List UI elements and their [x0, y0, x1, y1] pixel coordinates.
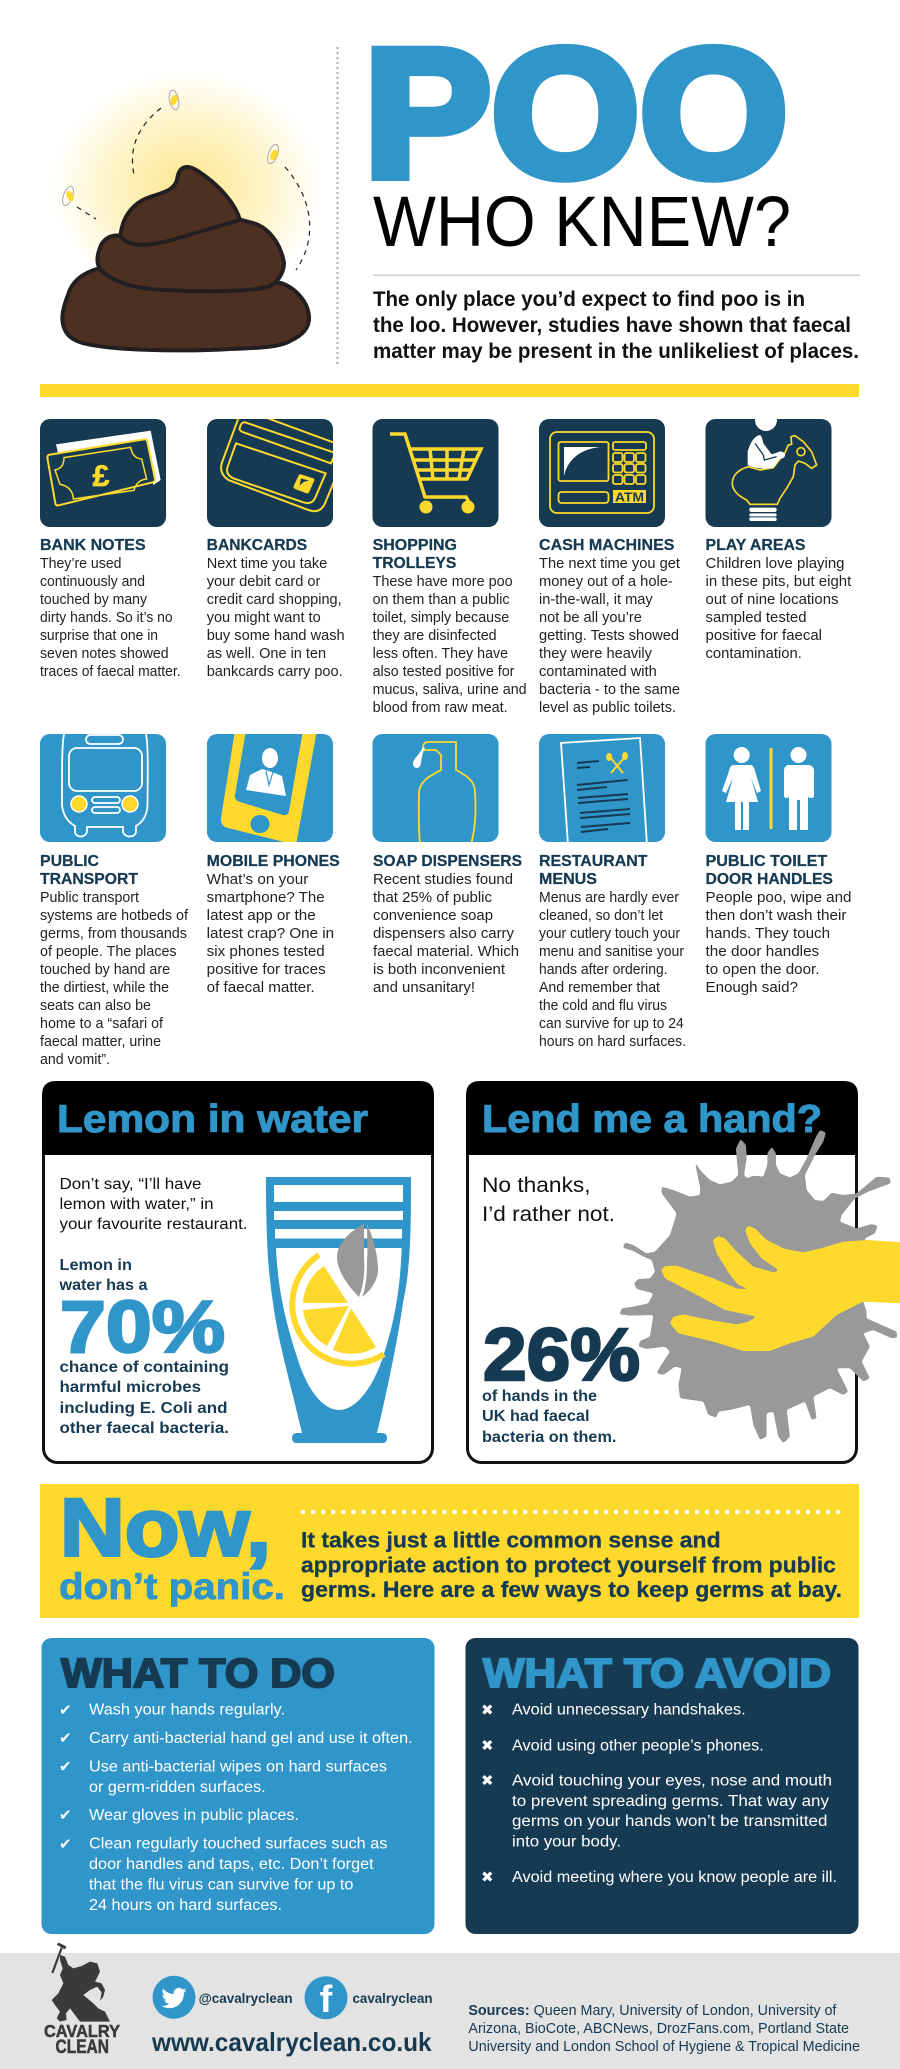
text: [706, 537, 852, 662]
stat caption: harmful microbes: [60, 1379, 201, 1396]
text: DOOR HANDLES: [706, 871, 833, 888]
text: PLAY AREAS: [706, 537, 806, 554]
intro text: No thanks,: [482, 1174, 591, 1197]
checklist: or germ-ridden surfaces.: [89, 1779, 266, 1796]
checklist: ✔: [59, 1701, 72, 1719]
text: BANK NOTES: [40, 537, 146, 554]
checklist: Clean regularly touched surfaces such as: [89, 1836, 388, 1853]
social: facebook: [304, 1976, 432, 2021]
checklist: ✔: [59, 1806, 72, 1824]
text: your debit card or: [207, 573, 320, 590]
text: buy some hand wash: [207, 627, 345, 644]
text: [40, 853, 189, 1068]
avoid list: Avoid unnecessary handshakes.: [512, 1702, 746, 1719]
icon: trolley: [372, 419, 498, 527]
card: restaurant menus: [539, 734, 686, 1050]
text: of people. The places: [40, 943, 177, 960]
text: They’re used: [40, 555, 122, 572]
text: as well. One in ten: [207, 645, 326, 662]
icon: knight on horse: [51, 1943, 110, 2022]
text: faecal matter, urine: [40, 1033, 161, 1050]
intro text: I’d rather not.: [482, 1203, 615, 1226]
banner text: germs. Here are a few ways to keep germs at bay.: [301, 1577, 842, 1602]
avoid list: ✖: [481, 1772, 494, 1790]
avoid list: Avoid meeting where you know people are ill.: [512, 1869, 837, 1886]
social: facebook: f: [320, 1979, 333, 2021]
icon: menu: [539, 734, 665, 845]
heading: don't panic.: don’t panic.: [59, 1566, 285, 1607]
intro text: [60, 1176, 248, 1233]
stat text: water has a: [58, 1277, 148, 1294]
text: [40, 537, 181, 680]
text: you might want to: [207, 609, 321, 626]
stat caption: [482, 1388, 616, 1446]
icon: flies: [60, 89, 281, 207]
text: in these pits, but eight: [706, 573, 852, 590]
text: [207, 537, 345, 680]
text: [706, 853, 852, 996]
text: People poo, wipe and: [706, 889, 852, 906]
checklist: Use anti-bacterial wipes on hard surfaces: [89, 1758, 387, 1775]
text: in-the-wall, it may: [539, 591, 653, 608]
text: Recent studies found: [373, 871, 513, 888]
banner: now don't panic: [40, 1482, 859, 1618]
text: Next time you take: [207, 555, 327, 572]
avoid list: ✖: [481, 1701, 494, 1719]
intro text: [373, 288, 859, 363]
illustration: yellow hand: [661, 1226, 900, 1351]
text: and unsanitary!: [373, 979, 475, 996]
stat text: [58, 1257, 148, 1294]
stat caption: including E. Coli and: [60, 1400, 228, 1417]
text: contamination.: [706, 645, 802, 662]
text: systems are hotbeds of: [40, 907, 189, 924]
text: traces of faecal matter.: [40, 663, 181, 680]
text: not be all you’re: [539, 609, 642, 626]
text: Menus are hardly ever: [539, 889, 679, 906]
icon: bank card: [207, 419, 333, 527]
text: money out of a hole-: [539, 573, 673, 590]
avoid list: into your body.: [512, 1834, 621, 1851]
text: mucus, saliva, urine and: [373, 681, 527, 698]
text: Public transport: [40, 889, 140, 906]
text: RESTAURANT: [539, 853, 648, 870]
heading: WHAT TO DO: [61, 1650, 335, 1696]
sources: Sources: Queen Mary, University of London, University of: [468, 2003, 836, 2019]
text: touched by many: [40, 591, 147, 608]
social: twitter: @cavalryclean: [199, 1990, 293, 2006]
intro text: your favourite restaurant.: [60, 1216, 248, 1233]
text: TRANSPORT: [40, 871, 139, 888]
text: your cutlery touch your: [539, 925, 680, 942]
heading: Lend me a hand?: [482, 1098, 822, 1141]
text: is both inconvenient: [373, 961, 506, 978]
text: faecal material. Which: [373, 943, 519, 960]
title: WHO KNEW?: WHO KNEW?: [373, 183, 791, 262]
text: positive for faecal: [706, 627, 822, 644]
text: credit card shopping,: [207, 591, 342, 608]
checklist: Wash your hands regularly.: [89, 1702, 285, 1719]
card: public transport: [40, 734, 189, 1068]
text: dirty hands. So it’s no: [40, 609, 173, 626]
avoid list: [481, 1701, 837, 1886]
text: [207, 853, 340, 996]
intro text: Don’t say, “I’ll have: [60, 1176, 202, 1193]
social: facebook: cavalryclean: [352, 1990, 432, 2006]
text: What’s on your: [207, 871, 308, 888]
panel: lemon in water: [42, 1081, 434, 1462]
text: can survive for up to 24: [539, 1015, 684, 1032]
text: dispensers also carry: [373, 925, 514, 942]
avoid list: to prevent spreading germs. That way any: [512, 1793, 829, 1810]
logo: cavalry clean: [44, 1943, 120, 2058]
text: germs, from thousands: [40, 925, 187, 942]
text: home to a “safari of: [40, 1015, 164, 1032]
checklist: ✔: [59, 1729, 72, 1747]
text: continuously and: [40, 573, 145, 590]
avoid list: ✖: [481, 1736, 494, 1754]
stat: 26%: 26%: [483, 1313, 640, 1396]
dotted divider: [336, 47, 338, 365]
text: six phones tested: [207, 943, 325, 960]
text: they are disinfected: [373, 627, 497, 644]
text: then don’t wash their: [706, 907, 847, 924]
text: Enough said?: [706, 979, 798, 996]
text: SOAP DISPENSERS: [373, 853, 522, 870]
banner text: [301, 1528, 842, 1602]
website url: www.cavalryclean.co.uk: [151, 2027, 432, 2057]
banner text: It takes just a little common sense and: [301, 1528, 721, 1553]
text: MOBILE PHONES: [207, 853, 340, 870]
text: These have more poo: [373, 573, 513, 590]
avoid list: Avoid touching your eyes, nose and mouth: [512, 1772, 832, 1789]
stat text: Lemon in: [60, 1257, 132, 1274]
text: bacteria - to the same: [539, 681, 680, 698]
text: The next time you get: [539, 555, 681, 572]
panel: lend me a hand: [466, 1081, 900, 1462]
checklist: that the flu virus can survive for up to: [89, 1876, 353, 1893]
text: also tested positive for: [373, 663, 514, 680]
icon: ATM: ATM: [615, 490, 644, 504]
text: on them than a public: [373, 591, 510, 608]
panel: what to do: [42, 1638, 434, 1934]
text: [539, 537, 681, 716]
stat caption: bacteria on them.: [482, 1429, 616, 1446]
card: shopping trolleys: [372, 419, 527, 716]
header rule: [373, 274, 860, 276]
checklist: [59, 1701, 413, 1914]
text: contaminated with: [539, 663, 657, 680]
banner text: appropriate action to protect yourself from public: [301, 1552, 836, 1577]
stat caption: of hands in the: [482, 1388, 597, 1405]
text: blood from raw meat.: [373, 699, 508, 716]
stat caption: [60, 1359, 229, 1437]
checklist: ✔: [59, 1758, 72, 1776]
text: menu and sanitise your: [539, 943, 684, 960]
intro text: the loo. However, studies have shown that faecal: [373, 314, 851, 337]
sources: Arizona, BioCote, ABCNews, DrozFans.com, Portland State: [468, 2021, 849, 2037]
text: out of nine locations: [706, 591, 838, 608]
text: that 25% of public: [373, 889, 492, 906]
card: public toilet door handles: [706, 734, 852, 996]
stat caption: chance of containing: [60, 1359, 229, 1376]
stat caption: other faecal bacteria.: [60, 1420, 229, 1437]
text: And remember that: [539, 979, 661, 996]
text: [373, 537, 527, 716]
checklist: ✔: [59, 1835, 72, 1853]
text: level as public toilets.: [539, 699, 676, 716]
icon: toilet figures: [706, 734, 832, 842]
checklist: 24 hours on hard surfaces.: [89, 1897, 282, 1914]
card: bank notes: [40, 419, 181, 680]
text: SHOPPING: [373, 537, 457, 554]
icon: phone: [207, 730, 333, 845]
text: surprise that one in: [40, 627, 158, 644]
yellow divider bar: [40, 384, 859, 397]
title: POO: POO: [364, 11, 788, 215]
text: touched by hand are: [40, 961, 170, 978]
card: mobile phones: [207, 730, 340, 996]
text: and vomit”.: [40, 1051, 110, 1068]
text: TROLLEYS: [373, 555, 456, 572]
avoid list: germs on your hands won’t be transmitted: [512, 1813, 827, 1830]
text: the dirtiest, while the: [40, 979, 169, 996]
text: BANKCARDS: [207, 537, 307, 554]
text: latest app or the: [207, 907, 316, 924]
icon: glass with lemon: [266, 1177, 411, 1443]
logo: cavalry clean: CLEAN: [56, 2037, 109, 2058]
avoid list: Avoid using other people’s phones.: [512, 1737, 764, 1754]
text: [373, 853, 522, 996]
heading: Lemon in water: [57, 1098, 368, 1141]
panel: what to avoid: [466, 1638, 858, 1934]
text: the door handles: [706, 943, 819, 960]
text: [539, 853, 686, 1050]
icon: spring rider: [706, 409, 832, 527]
text: getting. Tests showed: [539, 627, 679, 644]
intro text: [482, 1174, 615, 1226]
logo: cavalry clean: CAVALRY: [44, 2021, 120, 2041]
text: toilet, simply because: [373, 609, 509, 626]
text: smartphone? The: [207, 889, 325, 906]
text: CASH MACHINES: [539, 537, 674, 554]
avoid list: ✖: [481, 1868, 494, 1886]
text: convenience soap: [373, 907, 493, 924]
sources: [468, 2003, 860, 2055]
text: sampled tested: [706, 609, 806, 626]
intro text: matter may be present in the unlikeliest of places.: [373, 340, 859, 363]
text: cleaned, so don’t let: [539, 907, 664, 924]
card: cash machines: [539, 419, 681, 716]
intro text: lemon with water,” in: [60, 1196, 214, 1213]
icon: ATM: [539, 419, 665, 527]
text: PUBLIC: [40, 853, 99, 870]
text: PUBLIC TOILET: [706, 853, 828, 870]
icon: soap bottle: [372, 734, 498, 845]
text: of faecal matter.: [207, 979, 315, 996]
text: hands after ordering.: [539, 961, 668, 978]
text: bankcards carry poo.: [207, 663, 343, 680]
text: MENUS: [539, 871, 597, 888]
text: latest crap? One in: [207, 925, 334, 942]
fly paths: [77, 108, 310, 270]
text: hands. They touch: [706, 925, 830, 942]
text: to open the door.: [706, 961, 820, 978]
text: less often. They have: [373, 645, 508, 662]
checklist: Carry anti-bacterial hand gel and use it often.: [89, 1730, 413, 1747]
text: hours on hard surfaces.: [539, 1033, 686, 1050]
icon: bank notes: £: [93, 460, 110, 493]
stat: 70%: 70%: [60, 1287, 225, 1368]
stat caption: UK had faecal: [482, 1408, 590, 1425]
card: play areas: [706, 409, 852, 662]
checklist: Wear gloves in public places.: [89, 1807, 299, 1824]
icon: bus: [40, 734, 166, 842]
dotted line: [303, 1510, 846, 1514]
card: soap dispensers: [372, 734, 522, 996]
illustration: splat: [619, 1130, 897, 1443]
heading: WHAT TO AVOID: [483, 1650, 831, 1696]
heading: Now,: Now,: [60, 1482, 271, 1574]
text: seats can also be: [40, 997, 151, 1014]
intro text: The only place you’d expect to find poo is in: [373, 288, 805, 311]
text: the cold and flu virus: [539, 997, 667, 1014]
text: they were heavily: [539, 645, 652, 662]
sources: University and London School of Hygiene & Tropical Medicine: [468, 2039, 860, 2055]
footer: [0, 1943, 900, 2069]
icon: bank notes: [40, 419, 166, 527]
icon: poo: [62, 167, 309, 350]
text: positive for traces: [207, 961, 326, 978]
card: bankcards: [207, 417, 345, 680]
text: seven notes showed: [40, 645, 169, 662]
poo illustration with flies: [52, 60, 322, 350]
social: twitter: [152, 1976, 293, 2019]
text: Children love playing: [706, 555, 844, 572]
checklist: door handles and taps, etc. Don’t forget: [89, 1856, 374, 1873]
